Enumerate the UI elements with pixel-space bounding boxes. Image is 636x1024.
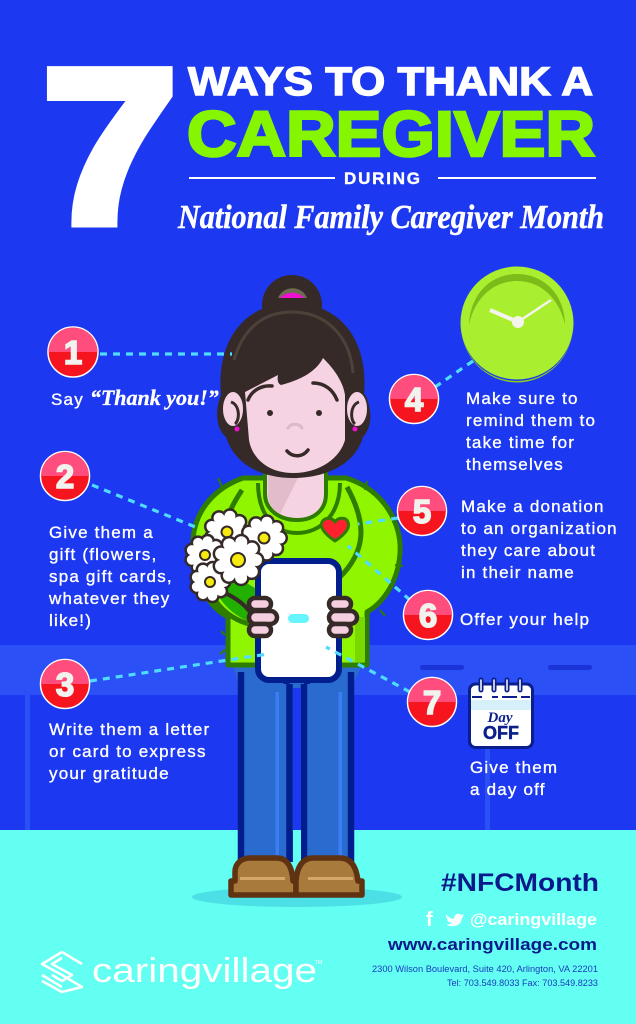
connector lines bbox=[90, 354, 473, 692]
flower bbox=[220, 542, 256, 578]
badge 1: 1 bbox=[64, 334, 82, 371]
phone and fax: Tel: 703.549.8033 Fax: 703.549.8233 bbox=[447, 978, 598, 988]
step 1 bbox=[48, 327, 219, 410]
ears bbox=[222, 391, 368, 432]
badge 5: 5 bbox=[413, 493, 431, 530]
address: 2300 Wilson Boulevard, Suite 420, Arlington, VA 22201 bbox=[372, 964, 598, 974]
trademark: TM bbox=[315, 960, 322, 966]
text 7: Give them bbox=[470, 758, 558, 777]
flower bbox=[211, 516, 243, 548]
big numeral 7: 7 bbox=[42, 25, 178, 270]
step 4 bbox=[390, 374, 596, 474]
text 7: a day off bbox=[470, 780, 546, 799]
hashtag: #NFCMonth bbox=[441, 869, 599, 897]
text 6: Offer your help bbox=[460, 610, 590, 629]
hair highlights bbox=[234, 288, 353, 373]
step 7 bbox=[408, 678, 558, 799]
website: www.caringvillage.com bbox=[387, 935, 597, 954]
badge 1 bbox=[48, 327, 98, 377]
badge 3 bbox=[40, 660, 90, 708]
text 5: they care about bbox=[461, 541, 596, 560]
icon: day off calendar bbox=[470, 680, 532, 748]
divider with during: DURING bbox=[344, 169, 420, 188]
step 5 bbox=[398, 486, 618, 582]
badge 7: 7 bbox=[423, 684, 441, 721]
text 5: to an organization bbox=[461, 519, 618, 538]
letter card bbox=[258, 561, 339, 680]
face bbox=[245, 358, 345, 473]
badge 2: 2 bbox=[56, 458, 74, 495]
text 4: Make sure to bbox=[466, 389, 579, 408]
badge 4 bbox=[390, 374, 438, 424]
text 2: Give them a bbox=[49, 523, 154, 542]
text 2: gift (flowers, bbox=[49, 545, 157, 564]
hands bbox=[249, 598, 357, 636]
sweater bbox=[193, 478, 403, 665]
step 6 bbox=[404, 590, 590, 640]
text 5: Make a donation bbox=[461, 497, 605, 516]
title bbox=[42, 25, 604, 270]
icon: twitter bird bbox=[446, 914, 464, 926]
handle text: @caringvillage bbox=[470, 910, 597, 929]
step 2 bbox=[40, 452, 173, 630]
flower bouquet bbox=[191, 516, 280, 612]
text 3: your gratitude bbox=[49, 764, 170, 783]
badge 3: 3 bbox=[56, 666, 74, 703]
icon: day off calendar: Day bbox=[486, 710, 513, 726]
icon: clock bbox=[460, 266, 574, 382]
social handle bbox=[426, 909, 597, 931]
text 3: Write them a letter bbox=[49, 720, 210, 739]
badge 5 bbox=[398, 486, 446, 536]
flower bbox=[248, 522, 280, 554]
logo wordmark: caringvillage bbox=[92, 952, 317, 990]
text 2: like!) bbox=[49, 611, 92, 630]
text 2: spa gift cards, bbox=[49, 567, 173, 586]
text 4: themselves bbox=[466, 455, 564, 474]
heading line: ways to thank a: WAYS TO THANK A bbox=[188, 60, 593, 104]
flower bbox=[191, 541, 219, 569]
icon: day off calendar: OFF bbox=[483, 723, 519, 743]
text 5: in their name bbox=[461, 563, 575, 582]
badge 7 bbox=[408, 678, 456, 726]
logo icon bbox=[42, 952, 82, 992]
neck shadow bbox=[268, 470, 302, 514]
badge 2 bbox=[40, 452, 90, 500]
facial features bbox=[248, 383, 337, 456]
step 3 bbox=[40, 660, 210, 783]
logo bbox=[42, 952, 322, 992]
hair back and bun bbox=[217, 275, 370, 478]
icon: facebook: f bbox=[426, 909, 433, 931]
flower bbox=[196, 568, 224, 596]
badge 6 bbox=[404, 590, 452, 640]
text 2: whatever they bbox=[48, 589, 170, 608]
badge 4: 4 bbox=[405, 381, 424, 418]
text 4: remind them to bbox=[466, 411, 596, 430]
shoes bbox=[231, 858, 362, 895]
text 3: or card to express bbox=[49, 742, 207, 761]
shadow bbox=[192, 887, 402, 907]
neck bbox=[265, 468, 326, 520]
heading line: caregiver: CAREGIVER bbox=[187, 98, 595, 170]
heart pin bbox=[321, 518, 349, 541]
text 1: Say “Thank you!” bbox=[51, 385, 219, 410]
badge 6: 6 bbox=[419, 597, 437, 634]
illustration: caregiver character bbox=[192, 275, 403, 907]
pants bbox=[233, 665, 362, 862]
text 4: take time for bbox=[466, 433, 575, 452]
